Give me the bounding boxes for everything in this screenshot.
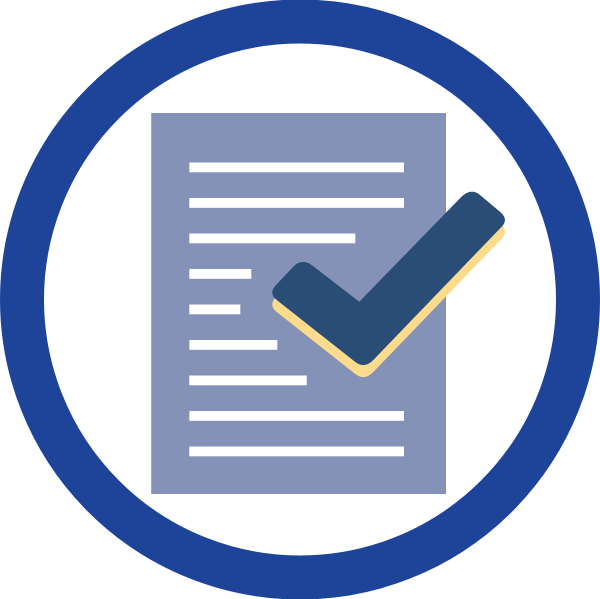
document page bbox=[151, 113, 446, 494]
checkmark shadow bbox=[272, 204, 505, 377]
checkmark bbox=[272, 192, 505, 365]
